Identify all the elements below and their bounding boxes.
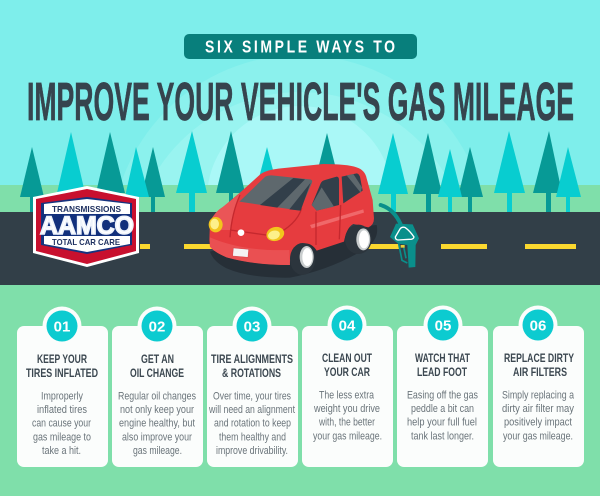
card 01: KEEP YOUR	[37, 354, 88, 366]
hose	[381, 205, 401, 224]
card 02: also improve your	[122, 432, 192, 444]
left headlight	[209, 217, 223, 232]
card 01: take a hit.	[42, 445, 81, 457]
road	[0, 212, 600, 285]
card 02: OIL CHANGE	[130, 368, 184, 380]
car body	[209, 164, 374, 265]
card 01: TIRES INFLATED	[26, 368, 98, 380]
card 02: not only keep your	[120, 404, 194, 416]
card 04: your gas mileage.	[313, 430, 382, 442]
card 06: dirty air filter may	[502, 403, 574, 415]
right headlight glow	[267, 229, 281, 241]
number plate	[233, 248, 249, 257]
card 06: Simply replacing a	[502, 390, 575, 402]
sky background	[0, 0, 600, 186]
AAMCO logo	[33, 186, 139, 267]
card 06: positively impact	[504, 416, 572, 428]
card 02: GET AN	[141, 354, 174, 366]
card 01: gas mileage to	[33, 432, 91, 444]
bumper highlight	[210, 237, 290, 265]
logo white panel	[44, 199, 130, 252]
trigger	[401, 245, 405, 248]
card 02: gas mileage.	[133, 445, 182, 457]
windshield stripes	[260, 178, 311, 211]
card 04: 04	[339, 318, 356, 334]
card 05: WATCH THAT	[415, 353, 470, 365]
card 03: 03	[244, 318, 260, 336]
windshield	[239, 175, 312, 211]
front wheel	[290, 243, 315, 275]
card 04: weight you drive	[313, 403, 380, 415]
logo top text: TRANSMISSIONS	[52, 204, 121, 214]
trigger guard	[399, 244, 407, 263]
card 05: peddle a bit can	[411, 403, 474, 415]
ground	[0, 185, 600, 496]
card 03: TIRE ALIGNMENTS	[211, 354, 293, 366]
logo red hexagon	[36, 189, 136, 264]
badge	[238, 229, 244, 236]
card 04: CLEAN OUT	[322, 353, 372, 365]
rear wheel	[345, 225, 372, 254]
card 01: can cause your	[32, 418, 91, 430]
logo main text: AAMCO	[40, 212, 134, 240]
hood highlight	[210, 193, 240, 230]
small subtitle banner: SIX SIMPLE WAYS TO	[205, 38, 395, 57]
door line	[230, 195, 341, 245]
card 02: Regular oil changes	[118, 390, 196, 402]
card 03: and rotation to keep	[214, 418, 291, 430]
card 01: 01	[54, 318, 70, 336]
card 02: engine healthy, but	[119, 418, 195, 430]
logo bottom text: TOTAL CAR CARE	[52, 237, 120, 247]
card 05: tank last longer.	[411, 430, 474, 442]
card 05: LEAD FOOT	[417, 367, 467, 379]
right headlight	[265, 225, 286, 243]
card 02: 02	[149, 318, 165, 336]
logo blue hexagon	[41, 197, 132, 254]
card 06: 06	[530, 318, 546, 334]
card 04: with, the better	[318, 416, 375, 428]
tree line	[20, 131, 581, 212]
nozzle body	[390, 224, 419, 268]
sun glow rings	[122, 59, 468, 185]
red car	[209, 164, 377, 278]
card 06: AIR FILTERS	[513, 367, 567, 379]
card 03: Over time, your tires	[213, 390, 291, 402]
rear side window	[342, 173, 363, 203]
card 05: help your full fuel	[407, 416, 477, 428]
front side window reflection	[312, 187, 334, 211]
small subtitle banner	[184, 34, 417, 59]
card 03: & ROTATIONS	[222, 368, 281, 380]
card 04	[302, 306, 393, 467]
fuel nozzle icon	[381, 205, 419, 268]
card 03	[207, 306, 298, 467]
card 06	[493, 306, 584, 467]
card 02	[112, 306, 203, 467]
left headlight glow	[210, 219, 219, 229]
front side window	[312, 177, 339, 211]
white triangle outline	[395, 227, 414, 240]
card 05: 05	[435, 318, 451, 334]
logo blue band	[42, 214, 132, 236]
card 06: REPLACE DIRTY	[504, 353, 574, 365]
car shadow	[210, 225, 377, 278]
card 05	[397, 306, 488, 467]
road centre dashes	[140, 244, 576, 249]
card 01: inflated tires	[37, 404, 87, 416]
card 06: your gas mileage.	[503, 430, 573, 442]
card 04: YOUR CAR	[324, 367, 371, 379]
card 03: will need an alignment	[208, 404, 295, 416]
card 03: them healthy and	[219, 432, 286, 444]
rear window reflection	[347, 174, 362, 193]
card 01: Improperly	[41, 390, 83, 402]
card 05: Easing off the gas	[407, 390, 478, 402]
card 03: improve drivability.	[216, 445, 288, 457]
door crease	[310, 209, 364, 228]
card 04: The less extra	[319, 390, 375, 402]
card 01	[17, 306, 108, 467]
logo outer hexagon	[33, 186, 139, 267]
